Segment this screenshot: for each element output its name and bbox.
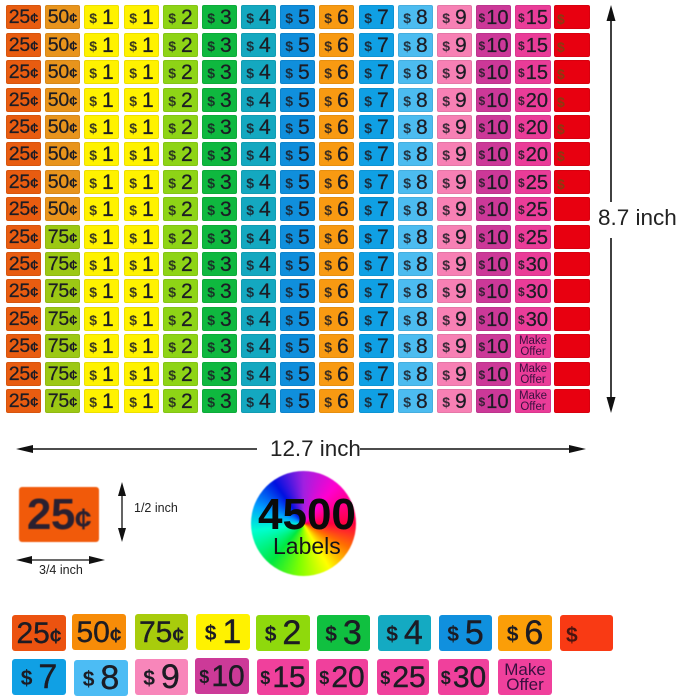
row 8: 25¢ (9, 198, 38, 220)
row 10: $3 (207, 253, 232, 276)
row 13: $9 (442, 335, 467, 358)
row 12: $2 (168, 308, 193, 331)
row 7: 50¢ (48, 171, 77, 193)
arrow: label height (118, 482, 126, 542)
row 11: 75¢ (48, 280, 77, 302)
row 13: 75¢ (48, 335, 77, 357)
legend row 1: $3 (325, 614, 362, 652)
row 9: $1 (89, 226, 114, 249)
row 14: $5 (285, 363, 310, 386)
text: 4500: 4500 (258, 490, 356, 539)
row 10: $7 (364, 253, 389, 276)
row 13: $5 (285, 335, 310, 358)
row 11: $1 (89, 280, 114, 303)
row 12 (6, 307, 590, 331)
row 8: $5 (285, 198, 310, 221)
row 5: $4 (246, 116, 271, 139)
row 3: $3 (207, 61, 232, 84)
row 11: $30 (518, 281, 548, 303)
row 8: 50¢ (48, 198, 77, 220)
legend row 2: $25 (380, 661, 426, 694)
row 2: $6 (324, 34, 349, 57)
row 15: Offer (520, 400, 546, 412)
row 10: $5 (285, 253, 310, 276)
row 14: 75¢ (48, 363, 77, 385)
row 12: $10 (479, 309, 508, 331)
row 10: $10 (479, 254, 508, 276)
row 14: 25¢ (9, 363, 38, 385)
row 13: $4 (246, 335, 271, 358)
row 4: 50¢ (48, 89, 77, 111)
row 10: $9 (442, 253, 467, 276)
row 4: $1 (129, 89, 154, 112)
row 9: $3 (207, 226, 232, 249)
row 4: $7 (364, 89, 389, 112)
row 5: $5 (285, 116, 310, 139)
row 14: $1 (89, 363, 114, 386)
row 5: $2 (168, 116, 193, 139)
row 14: $9 (442, 363, 467, 386)
row 8: $4 (246, 198, 271, 221)
row 13: $6 (324, 335, 349, 358)
row 7: $4 (246, 171, 271, 194)
row 7: $1 (89, 171, 114, 194)
row 8: $9 (442, 198, 467, 221)
text: label height 1/2 inch: 1/2 inch (134, 501, 178, 515)
row 11: $4 (246, 280, 271, 303)
colour wheel (251, 471, 356, 576)
legend row 1: 50¢ (76, 616, 122, 649)
row 12: $8 (403, 308, 428, 331)
row 13 (6, 334, 590, 358)
row 3: 50¢ (48, 61, 77, 83)
row 5: $ (557, 121, 565, 137)
row 15: $6 (324, 390, 349, 413)
row 5: $7 (364, 116, 389, 139)
arrow: sheet height, down (606, 238, 616, 413)
row 15: $7 (364, 390, 389, 413)
row 10: $6 (324, 253, 349, 276)
row 3 (6, 60, 590, 84)
row 2: $8 (403, 34, 428, 57)
row 2: $10 (479, 35, 508, 57)
row 14: $3 (207, 363, 232, 386)
row 4: $5 (285, 89, 310, 112)
row 10: $1 (89, 253, 114, 276)
row 6: $ (557, 148, 565, 164)
text: label width 3/4 inch: 3/4 inch (39, 563, 83, 577)
row 6: $8 (403, 143, 428, 166)
arrow: label width (16, 556, 105, 564)
row 1: $7 (364, 6, 389, 29)
row 1: 25¢ (9, 6, 38, 28)
legend row 2: $20 (319, 661, 365, 694)
row 6: $2 (168, 143, 193, 166)
arrow: sheet height, up (606, 5, 616, 202)
row 5: $9 (442, 116, 467, 139)
row 1: $9 (442, 6, 467, 29)
row 14: $8 (403, 363, 428, 386)
row 9: 75¢ (48, 226, 77, 248)
row 4: $8 (403, 89, 428, 112)
row 11: $3 (207, 280, 232, 303)
row 5: $1 (129, 116, 154, 139)
row 1: $5 (285, 6, 310, 29)
text: Labels: Labels (273, 533, 341, 559)
row 12: $6 (324, 308, 349, 331)
row 8: $6 (324, 198, 349, 221)
row 3: $1 (89, 61, 114, 84)
legend row 1: $1 (205, 613, 241, 651)
row 10: $30 (518, 254, 548, 276)
row 5 (6, 115, 590, 139)
row 4 (6, 88, 590, 112)
row 7: $10 (479, 172, 508, 194)
text: sheet height 8.7 inch: 8.7 inch (598, 205, 677, 230)
row 12: 75¢ (48, 308, 77, 330)
row 4: $9 (442, 89, 467, 112)
row 13: Make (519, 335, 547, 347)
legend row 1: $ (566, 624, 578, 647)
row 7: 25¢ (9, 171, 38, 193)
row 6: $9 (442, 143, 467, 166)
row 11: 25¢ (9, 280, 38, 302)
row 8 (6, 197, 590, 221)
row 4: $6 (324, 89, 349, 112)
row 1: $15 (518, 7, 548, 29)
row 7: $8 (403, 171, 428, 194)
row 2: $1 (129, 34, 154, 57)
row 10: $4 (246, 253, 271, 276)
row 9: $4 (246, 226, 271, 249)
row 11: $10 (479, 281, 508, 303)
row 1: $2 (168, 6, 193, 29)
row 5: $8 (403, 116, 428, 139)
row 9: $25 (518, 227, 548, 249)
row 12: $1 (89, 308, 114, 331)
row 6: 50¢ (48, 143, 77, 165)
legend row 1: $5 (447, 614, 484, 652)
row 4: $ (557, 94, 565, 110)
row 14 (6, 362, 590, 386)
row 2: $15 (518, 35, 548, 57)
row 7 (6, 170, 590, 194)
row 12: $7 (364, 308, 389, 331)
row 1: 50¢ (48, 6, 77, 28)
row 11: $7 (364, 280, 389, 303)
row 15: 75¢ (48, 390, 77, 412)
row 7: $9 (442, 171, 467, 194)
row 12: $3 (207, 308, 232, 331)
row 5: $10 (479, 117, 508, 139)
row 6: $4 (246, 143, 271, 166)
row 9: $5 (285, 226, 310, 249)
row 2: $1 (89, 34, 114, 57)
row 15: $2 (168, 390, 193, 413)
row 4: $4 (246, 89, 271, 112)
row 3: $2 (168, 61, 193, 84)
row 13: $2 (168, 335, 193, 358)
row 5: $3 (207, 116, 232, 139)
row 7: $ (557, 176, 565, 192)
row 2: $ (557, 39, 565, 55)
label sheet (6, 5, 590, 413)
row 15: $8 (403, 390, 428, 413)
row 6 (6, 142, 590, 166)
legend row 2: $9 (143, 658, 180, 696)
row 9: $9 (442, 226, 467, 249)
row 5: $20 (518, 117, 548, 139)
row 1: $8 (403, 6, 428, 29)
legend row 2: $7 (21, 658, 57, 696)
row 14: Make (519, 363, 547, 375)
row 2: $9 (442, 34, 467, 57)
row 8: $2 (168, 198, 193, 221)
row 9: $6 (324, 226, 349, 249)
row 13: $1 (129, 335, 154, 358)
row 13: $1 (89, 335, 114, 358)
row 11: $2 (168, 280, 193, 303)
legend row 2: Offer (506, 675, 544, 694)
row 1: $3 (207, 6, 232, 29)
row 1: $1 (89, 6, 114, 29)
row 10: 25¢ (9, 253, 38, 275)
row 12: $5 (285, 308, 310, 331)
row 10: $8 (403, 253, 428, 276)
legend row 1: $4 (386, 614, 423, 652)
row 3: $9 (442, 61, 467, 84)
row 14: $1 (129, 363, 154, 386)
row 12: $9 (442, 308, 467, 331)
legend row 1: 75¢ (139, 616, 184, 649)
row 2: $2 (168, 34, 193, 57)
row 7: $7 (364, 171, 389, 194)
row 7: $1 (129, 171, 154, 194)
row 11 (6, 279, 590, 303)
row 5: 50¢ (48, 116, 77, 138)
row 7: $25 (518, 172, 548, 194)
row 3: $ (557, 66, 565, 82)
row 3: 25¢ (9, 61, 38, 83)
legend row 2: $10 (199, 660, 245, 693)
row 2: $4 (246, 34, 271, 57)
row 2: 25¢ (9, 34, 38, 56)
row 7: $3 (207, 171, 232, 194)
row 11: $5 (285, 280, 310, 303)
legend row 1: $2 (265, 614, 301, 652)
row 4: $20 (518, 90, 548, 112)
row 3: $6 (324, 61, 349, 84)
row 14: $10 (479, 364, 508, 386)
row 3: $4 (246, 61, 271, 84)
row 15: $4 (246, 390, 271, 413)
legend row 2: Make (504, 660, 546, 679)
row 15: $5 (285, 390, 310, 413)
row 4: 25¢ (9, 89, 38, 111)
row 3: $10 (479, 62, 508, 84)
row 8: $1 (129, 198, 154, 221)
row 6: $7 (364, 143, 389, 166)
row 6: $1 (129, 143, 154, 166)
row 14: $6 (324, 363, 349, 386)
row 10 (6, 252, 590, 276)
row 7: $6 (324, 171, 349, 194)
row 8: $7 (364, 198, 389, 221)
row 4: $2 (168, 89, 193, 112)
row 15: 25¢ (9, 390, 38, 412)
row 11: $9 (442, 280, 467, 303)
row 13: 25¢ (9, 335, 38, 357)
row 8: $10 (479, 199, 508, 221)
row 1 (6, 5, 590, 29)
row 12: $4 (246, 308, 271, 331)
legend row 1: $6 (507, 614, 543, 652)
row 15: Make (519, 390, 547, 402)
row 14: $2 (168, 363, 193, 386)
row 15: $9 (442, 390, 467, 413)
row 11: $6 (324, 280, 349, 303)
row 8: $8 (403, 198, 428, 221)
row 4: $10 (479, 90, 508, 112)
row 5: 25¢ (9, 116, 38, 138)
row 14: $7 (364, 363, 389, 386)
row 6: $6 (324, 143, 349, 166)
row 6: 25¢ (9, 143, 38, 165)
row 15: $10 (479, 391, 508, 413)
legend row 2: $8 (83, 659, 119, 697)
row 1: $4 (246, 6, 271, 29)
row 5: $6 (324, 116, 349, 139)
row 9: $7 (364, 226, 389, 249)
row 13: $7 (364, 335, 389, 358)
row 15: $1 (129, 390, 154, 413)
row 9: $8 (403, 226, 428, 249)
row 12: $30 (518, 309, 548, 331)
row 14: $4 (246, 363, 271, 386)
row 2: $3 (207, 34, 232, 57)
row 13: Offer (520, 346, 546, 358)
row 6: $20 (518, 144, 548, 166)
row 3: $7 (364, 61, 389, 84)
row 1: $ (557, 11, 565, 27)
row 10: 75¢ (48, 253, 77, 275)
row 15: $1 (89, 390, 114, 413)
row 5: $1 (89, 116, 114, 139)
badge: 4500 labels colour wheel (250, 470, 357, 577)
row 7: $5 (285, 171, 310, 194)
row 13: $3 (207, 335, 232, 358)
row 10: $2 (168, 253, 193, 276)
legend row 1: 25¢ (16, 617, 62, 650)
arrow: sheet width, left (16, 445, 257, 453)
legend row 2: $30 (441, 661, 486, 694)
row 4: $3 (207, 89, 232, 112)
row 8: $1 (89, 198, 114, 221)
row 8: $25 (518, 199, 548, 221)
legend row 2: $15 (260, 661, 306, 694)
row 9: 25¢ (9, 226, 38, 248)
row 9: $10 (479, 227, 508, 249)
row 2: 50¢ (48, 34, 77, 56)
row 14: Offer (520, 374, 546, 386)
row 3: $1 (129, 61, 154, 84)
row 6: $10 (479, 144, 508, 166)
row 6: $1 (89, 143, 114, 166)
row 7: $2 (168, 171, 193, 194)
row 3: $5 (285, 61, 310, 84)
row 1: $10 (479, 7, 508, 29)
row 13: $10 (479, 336, 508, 358)
row 6: $3 (207, 143, 232, 166)
row 2: $7 (364, 34, 389, 57)
row 11: $8 (403, 280, 428, 303)
single label example: 25 cents: 25¢ (27, 490, 91, 539)
row 12: $1 (129, 308, 154, 331)
row 3: $15 (518, 62, 548, 84)
row 2 (6, 33, 590, 57)
row 3: $8 (403, 61, 428, 84)
row 1: $6 (324, 6, 349, 29)
row 9: $1 (129, 226, 154, 249)
row 6: $5 (285, 143, 310, 166)
row 9: $2 (168, 226, 193, 249)
text: sheet width 12.7 inch: 12.7 inch (270, 436, 361, 461)
row 12: 25¢ (9, 308, 38, 330)
row 4: $1 (89, 89, 114, 112)
row 15: $3 (207, 390, 232, 413)
row 11: $1 (129, 280, 154, 303)
row 9 (6, 225, 590, 249)
row 1: $1 (129, 6, 154, 29)
row 15 (6, 389, 590, 413)
row 2: $5 (285, 34, 310, 57)
row 8: $3 (207, 198, 232, 221)
row 10: $1 (129, 253, 154, 276)
arrow: sheet width, right (360, 445, 586, 453)
row 13: $8 (403, 335, 428, 358)
